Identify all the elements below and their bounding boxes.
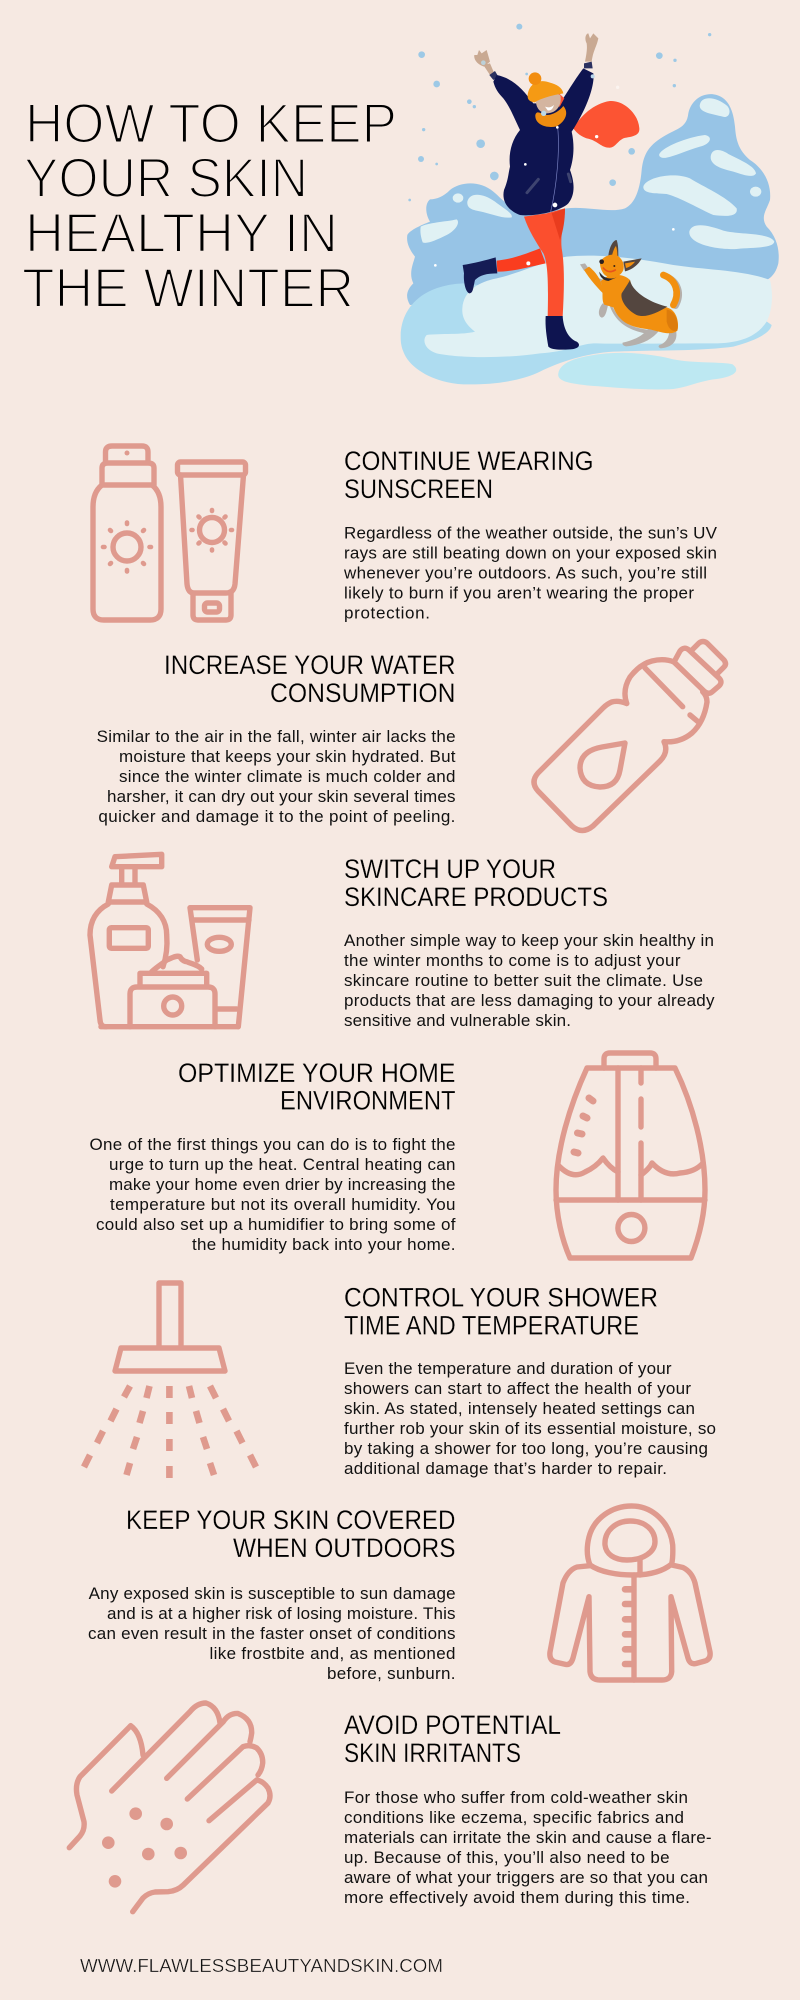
heading: optimize your home environment: ENVIRONMENT — [280, 1086, 456, 1116]
icon: dog — [580, 240, 679, 348]
text: covered body: like frostbite and, as mentioned — [210, 1644, 456, 1663]
heading: keep your skin covered when outdoors: WHEN OUTDOORS — [233, 1533, 456, 1563]
text: water body: since the winter climate is much colder and — [119, 767, 456, 786]
text: shower body: skin. As stated, intensely heated settings can — [344, 1399, 695, 1418]
text: shower body: showers can start to affect the health of your — [344, 1379, 691, 1398]
text: skincare body: Another simple way to keep your skin healthy in — [344, 931, 714, 950]
text: shower body — [344, 1359, 716, 1478]
text: home body — [90, 1135, 456, 1254]
text: skincare body: the winter months to come is to adjust your — [344, 951, 681, 970]
icon: humidifier — [556, 1053, 705, 1258]
text: irritants body: more effectively avoid them during this time. — [344, 1888, 690, 1907]
text: covered body: Any exposed skin is susceptible to sun damage — [89, 1584, 456, 1603]
text: irritants body: materials can irritate the skin and cause a flare- — [344, 1828, 712, 1847]
heading: increase your water consumption — [164, 650, 456, 708]
text: sunscreen body — [343, 523, 718, 622]
illustration: woman and dog playing in snow — [401, 24, 779, 389]
text: covered body: before, sunburn. — [327, 1664, 456, 1683]
text: skincare body: products that are less damaging to your already — [344, 991, 715, 1010]
text: skincare body: sensitive and vulnerable skin. — [344, 1011, 571, 1030]
text: covered body: can even result in the faster onset of conditions — [88, 1624, 456, 1643]
text: irritants body: aware of what your triggers are so that you can — [344, 1868, 708, 1887]
text: home body: One of the first things you can do is to fight the — [90, 1135, 456, 1154]
heading: switch up your skincare products: SWITCH UP YOUR — [344, 854, 556, 884]
icon: hooded jacket — [550, 1506, 710, 1680]
heading: control your shower time and temperature — [344, 1283, 658, 1341]
text: water body: harsher, it can dry out your skin several times — [107, 787, 456, 806]
heading: avoid potential skin irritants: SKIN IRRITANTS — [344, 1738, 521, 1768]
text: irritants body: conditions like eczema, specific fabrics and — [344, 1808, 684, 1827]
text: covered body: and is at a higher risk of losing moisture. This — [107, 1604, 456, 1623]
text: skincare body — [344, 931, 715, 1030]
text: home body: temperature but not its overall humidity. You — [110, 1195, 456, 1214]
icon: irritation dots — [102, 1807, 187, 1888]
text: irritants body — [344, 1788, 712, 1907]
text: shower body: by taking a shower for too long, you’re causing — [344, 1439, 708, 1458]
text: sunscreen body: protection. — [344, 603, 430, 622]
heading: avoid potential skin irritants — [344, 1710, 561, 1768]
text: water body: Similar to the air in the fall, winter air lacks the — [97, 727, 456, 746]
text: water body: quicker and damage it to the point of peeling. — [98, 807, 455, 826]
icon: shower head — [84, 1283, 256, 1478]
text: home body: make your home even drier by increasing the — [109, 1175, 456, 1194]
title — [22, 92, 397, 319]
heading: switch up your skincare products — [344, 854, 608, 912]
heading: keep your skin covered when outdoors: KEEP YOUR SKIN COVERED — [126, 1505, 456, 1535]
title: HOW TO KEEP — [25, 92, 397, 154]
text: water body: moisture that keeps your skin hydrated. But — [119, 747, 456, 766]
heading: switch up your skincare products: SKINCARE PRODUCTS — [344, 882, 608, 912]
text: irritants body: For those who suffer from cold-weather skin — [344, 1788, 688, 1807]
text: shower body: additional damage that’s harder to repair. — [344, 1459, 667, 1478]
title: YOUR SKIN — [24, 146, 308, 209]
text: shower body: further rob your skin of its essential moisture, so — [344, 1419, 716, 1438]
heading: keep your skin covered when outdoors — [126, 1505, 456, 1563]
heading: optimize your home environment: OPTIMIZE YOUR HOME — [178, 1058, 456, 1088]
icon: hand with skin irritation — [69, 1703, 270, 1912]
icon: water bottle — [534, 642, 726, 830]
text: irritants body: up. Because of this, you’ll also need to be — [344, 1848, 670, 1867]
heading: control your shower time and temperature: CONTROL YOUR SHOWER — [344, 1283, 658, 1313]
text: home body: the humidity back into your home. — [192, 1235, 456, 1254]
icon: skincare products — [90, 854, 250, 1027]
heading: continue wearing sunscreen — [344, 446, 594, 504]
title: THE WINTER — [22, 256, 354, 319]
title: HEALTHY IN — [25, 201, 338, 264]
text: home body: urge to turn up the heat. Central heating can — [109, 1155, 456, 1174]
heading: control your shower time and temperature: TIME AND TEMPERATURE — [344, 1311, 639, 1341]
text: sunscreen body: rays are still beating down on your exposed skin — [344, 543, 717, 562]
heading: optimize your home environment — [178, 1058, 456, 1116]
icon: sunscreen spray and tube — [93, 446, 246, 620]
text: sunscreen body: whenever you’re outdoors. As such, you’re still — [343, 563, 707, 582]
text: shower body: Even the temperature and duration of your — [344, 1359, 672, 1378]
heading: increase your water consumption: CONSUMPTION — [270, 678, 456, 708]
text: skincare body: skincare routine to better suit the climate. Use — [344, 971, 703, 990]
text: sunscreen body: likely to burn if you aren’t wearing the proper — [344, 583, 694, 602]
heading: avoid potential skin irritants: AVOID POTENTIAL — [344, 1710, 561, 1740]
text: covered body — [88, 1584, 456, 1683]
footer url: WWW.FLAWLESSBEAUTYANDSKIN.COM — [80, 1956, 443, 1976]
text: home body: could also set up a humidifier to bring some of — [96, 1215, 456, 1234]
text: sunscreen body: Regardless of the weather outside, the sun’s UV — [344, 523, 718, 542]
heading: increase your water consumption: INCREASE YOUR WATER — [164, 650, 456, 680]
text: water body — [97, 727, 456, 826]
heading: continue wearing sunscreen: CONTINUE WEARING — [344, 446, 594, 476]
heading: continue wearing sunscreen: SUNSCREEN — [344, 474, 493, 504]
